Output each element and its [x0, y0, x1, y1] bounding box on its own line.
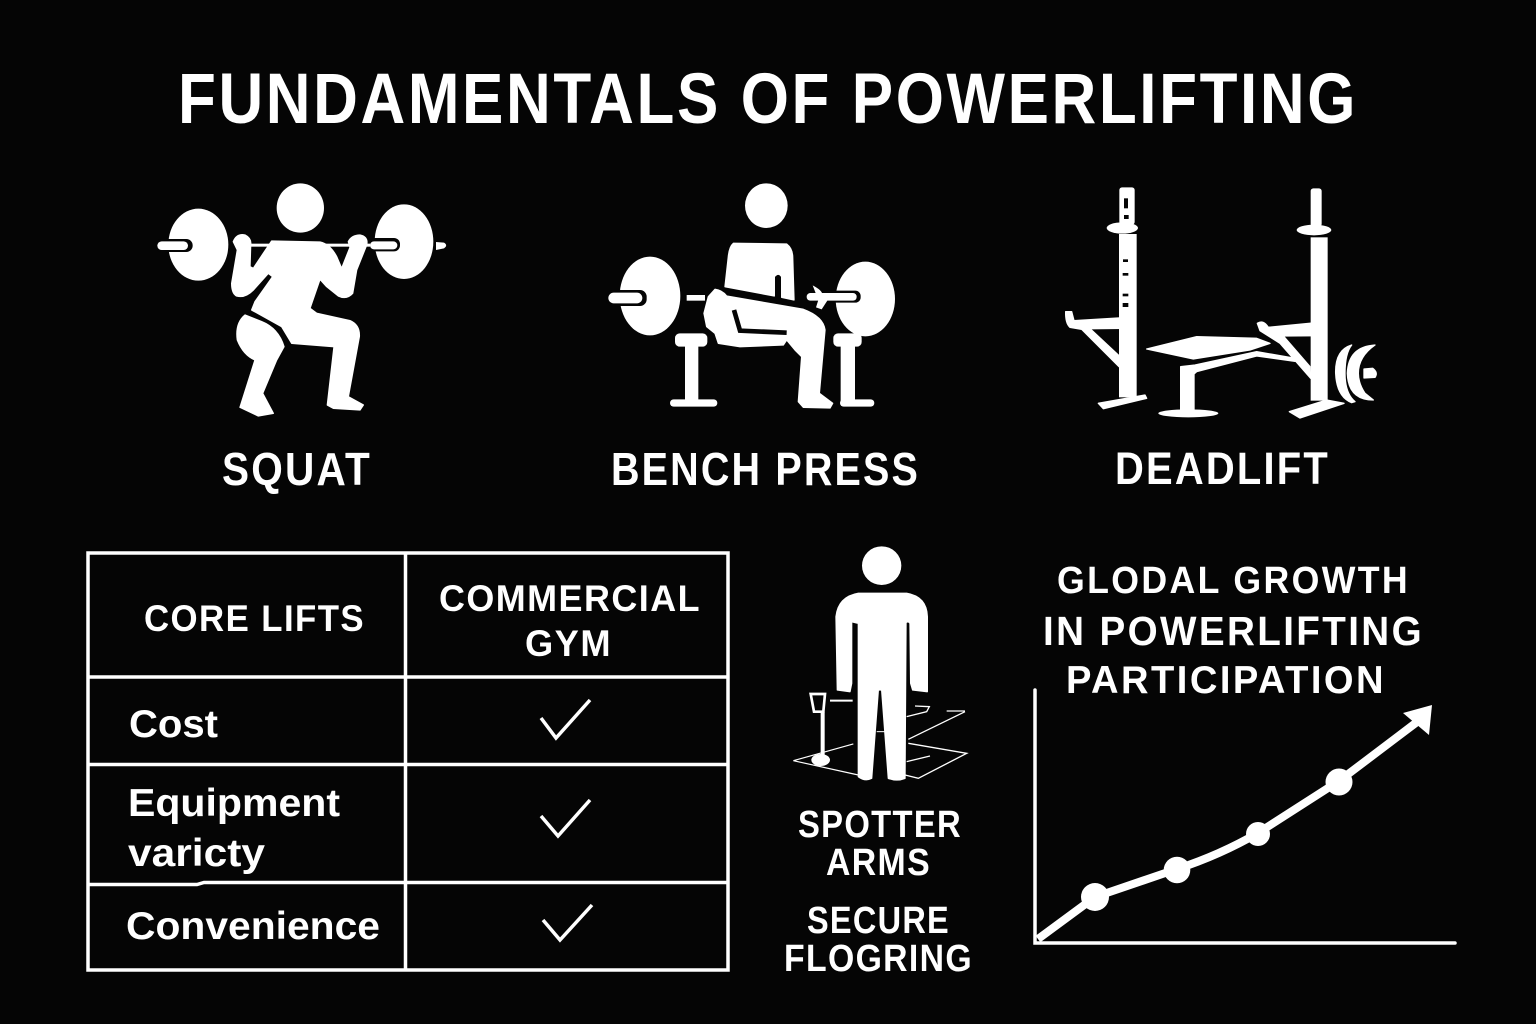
label: secure flooring	[784, 900, 973, 980]
icon: standing spotter	[793, 546, 967, 780]
label: spotter arms: ARMS	[826, 842, 931, 884]
panel: squat	[155, 183, 446, 495]
row label: equipment variety: varicty	[128, 832, 265, 875]
row label: convenience: Convenience	[126, 905, 380, 948]
table header: commercial gym	[439, 578, 701, 664]
title: FUNDAMENTALS OF POWERLIFTING	[178, 60, 1358, 139]
check mark: cost	[541, 700, 590, 738]
icon: squat lifter	[155, 183, 446, 416]
data points	[1081, 768, 1352, 911]
chart axes	[1035, 690, 1455, 943]
icon: bench press lifter	[606, 183, 895, 408]
table header: commercial gym: GYM	[525, 623, 612, 664]
panel: deadlift	[1066, 187, 1376, 494]
row label: equipment variety: Equipment	[128, 782, 340, 825]
table grid	[88, 553, 728, 970]
label: deadlift: DEADLIFT	[1115, 443, 1330, 494]
row label: equipment variety	[128, 782, 340, 875]
icon: barbell rack and bench	[1066, 187, 1376, 418]
panel: bench press	[606, 183, 920, 495]
label: secure flooring: SECURE	[807, 900, 950, 942]
panel: spotter and safety	[784, 546, 973, 980]
check mark: convenience	[543, 905, 592, 940]
label: bench press: BENCH PRESS	[611, 443, 920, 495]
table header: commercial gym: COMMERCIAL	[439, 578, 701, 619]
chart title	[1043, 560, 1424, 702]
label: squat: SQUAT	[222, 443, 372, 495]
panel: global growth chart	[1035, 560, 1455, 943]
label: spotter arms: SPOTTER	[798, 804, 962, 846]
label: spotter arms	[798, 804, 962, 884]
chart title: GLODAL GROWTH	[1057, 560, 1410, 602]
row label: cost: Cost	[129, 703, 218, 746]
label: secure flooring: FLOGRING	[784, 938, 973, 980]
check mark: equipment variety	[541, 800, 590, 836]
chart title: PARTICIPATION	[1066, 659, 1386, 702]
table header: core lifts: CORE LIFTS	[144, 598, 365, 639]
panel: comparison table	[88, 553, 728, 970]
growth line with arrow	[1038, 705, 1432, 939]
chart title: IN POWERLIFTING	[1043, 608, 1424, 654]
